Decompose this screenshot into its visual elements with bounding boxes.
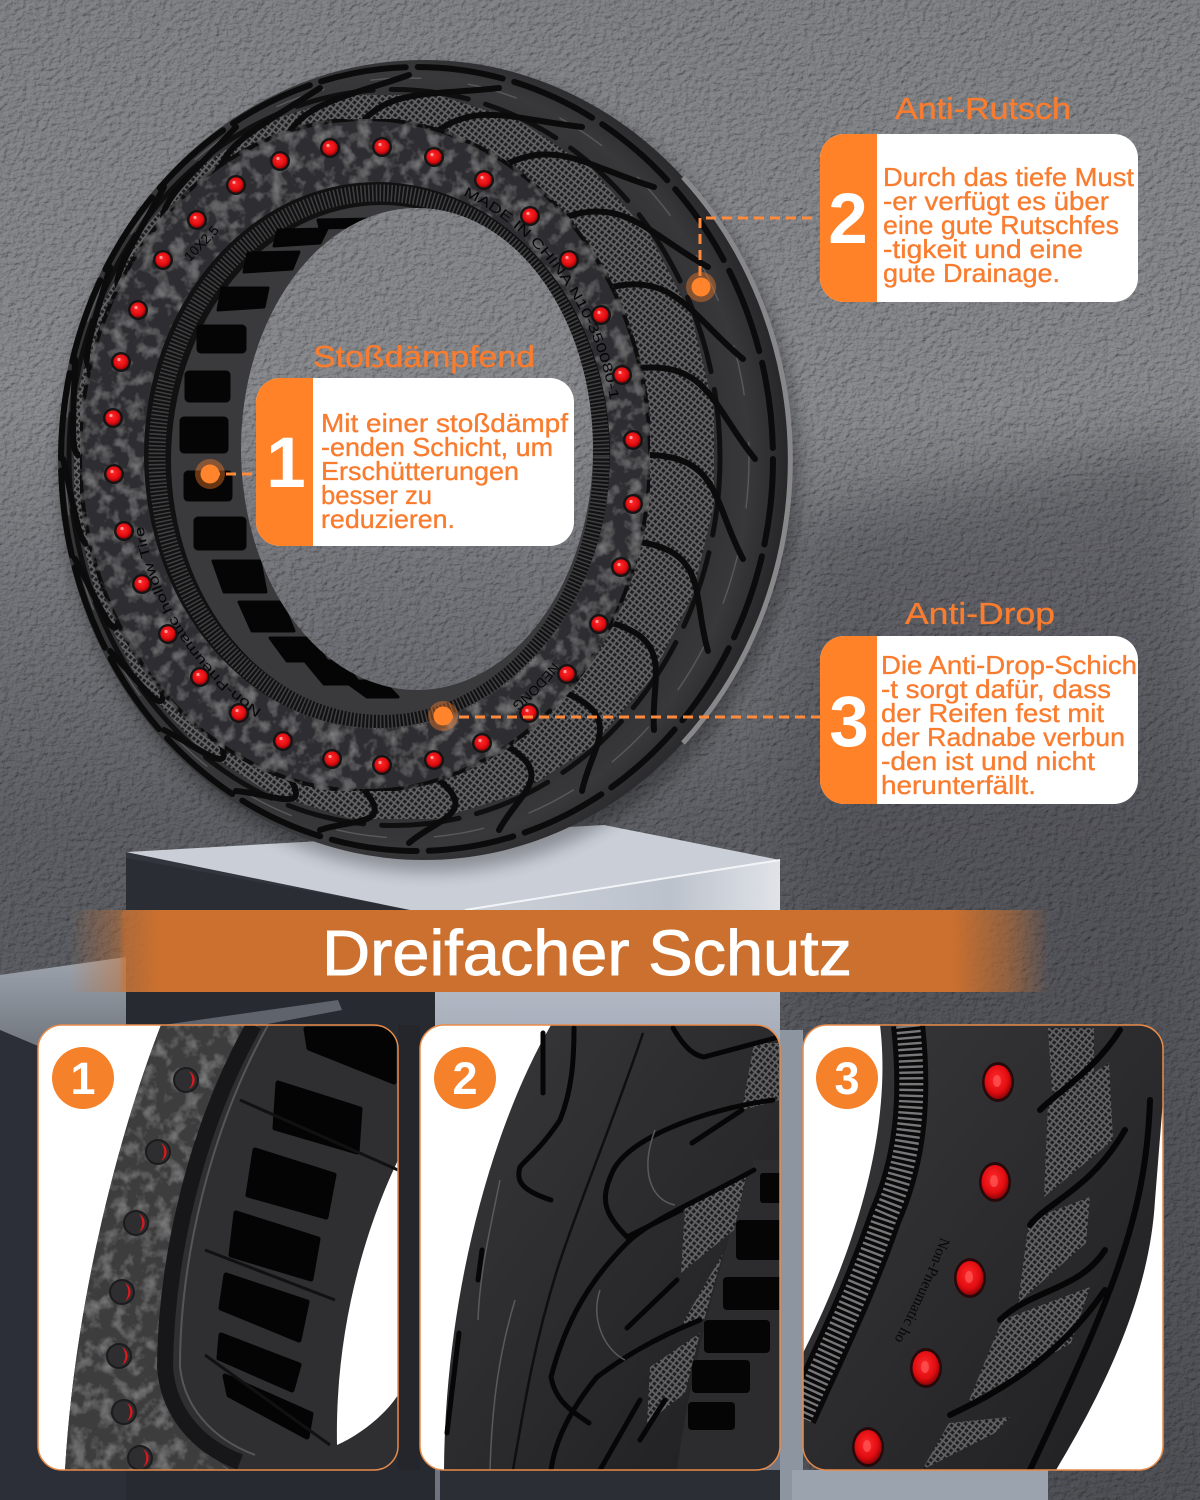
card 2: [820, 134, 1138, 302]
panel 3 mesh: [922, 1028, 1113, 1470]
card 2: 2: [828, 180, 868, 259]
panel 2 badge: [434, 1047, 496, 1109]
pedestal and lower blocks: [0, 825, 1048, 1500]
rim highlight: [683, 177, 790, 743]
card 3: herunterfällt.: [881, 770, 1036, 800]
card 1: Erschütterungen: [321, 456, 519, 486]
panel 3 grooves: [950, 1030, 1150, 1470]
card 1: besser zu: [321, 480, 432, 510]
leader line 1: [210, 472, 256, 476]
red dots: [103, 137, 643, 775]
heading 3: Anti-Drop: [905, 596, 1055, 631]
card 3: [820, 636, 1138, 804]
sidewall lettering: [137, 187, 618, 717]
title banner: [70, 910, 1050, 992]
card 3: Die Anti-Drop-Schich: [881, 650, 1137, 680]
leader line 2: [700, 218, 812, 287]
card 1: -enden Schicht, um: [321, 432, 553, 462]
panel 2 slots: [678, 1310, 779, 1469]
panel 2 badge: 2: [452, 1053, 478, 1104]
card 1: Mit einer stoßdämpf: [321, 408, 569, 438]
card 1: 1: [266, 424, 306, 503]
sidewall lettering: NEDONG: [513, 663, 559, 710]
callout 1: Stoßdämpfend: [256, 339, 574, 546]
card 2: -er verfügt es über: [883, 186, 1109, 216]
tread mesh patches: [74, 95, 714, 819]
panel 2: tread close-up: [420, 1025, 786, 1470]
panel 3: red dots close-up: [802, 1024, 1164, 1471]
tyre main photo: [54, 60, 806, 881]
panel 1 dots: [106, 1067, 199, 1471]
callout 3: Anti-Drop: [820, 596, 1138, 804]
title banner: Dreifacher Schutz: [322, 917, 852, 989]
panel 1 badge: 1: [70, 1053, 96, 1104]
panel 1 tyre: [65, 1025, 398, 1470]
card 1: reduzieren.: [321, 504, 455, 534]
panel 3 lettering: Non-Pneumatic ho: [896, 1238, 950, 1342]
marker 3: [428, 701, 458, 731]
panel 3 badge: 3: [834, 1053, 860, 1104]
card 3: 3: [829, 683, 869, 762]
panel 2 grooves: [447, 1028, 779, 1470]
panel 3 tyre: [803, 1025, 1163, 1470]
panel 2 border: [420, 1025, 780, 1470]
panel 1: sidewall close-up: [38, 1025, 398, 1471]
card 3: -t sorgt dafür, dass: [881, 674, 1111, 704]
panel 1 badge: [52, 1047, 114, 1109]
tyre body: [58, 60, 790, 860]
inner wall with slots: [171, 205, 593, 715]
leader line 3: [443, 716, 820, 718]
inner rib: [144, 182, 610, 728]
heading 1: Stoßdämpfend: [313, 339, 535, 374]
panel 1 border: [38, 1025, 398, 1470]
panel 3 border: [803, 1025, 1163, 1470]
panel 2 mesh: [647, 1043, 779, 1423]
sidewall lettering: MADE IN CHINA N10-350080-1: [464, 187, 618, 399]
ventilation slots: [181, 219, 398, 697]
panel 2 tyre: [444, 1025, 780, 1470]
card 2: gute Drainage.: [883, 258, 1060, 288]
card 3: der Radnabe verbun: [881, 722, 1125, 752]
tyre shadow: [60, 68, 800, 872]
callout 2: Anti-Rutsch: [820, 91, 1138, 302]
card 3: -den ist und nicht: [881, 746, 1096, 776]
card 1: [256, 378, 574, 546]
tread grooves: [61, 67, 773, 851]
card 3: der Reifen fest mit: [881, 698, 1105, 728]
sidewall lettering: 10X2.5: [185, 226, 218, 262]
card 2: eine gute Rutschfes: [883, 210, 1119, 240]
panel 3 badge: [816, 1047, 878, 1109]
sidewall lettering: Non-Pneumatic hollow Tire: [137, 528, 261, 717]
panel 3 dots: [852, 1062, 1014, 1467]
card 2: Durch das tiefe Must: [883, 162, 1135, 192]
marker 1: [195, 459, 225, 489]
card 2: -tigkeit und eine: [883, 234, 1083, 264]
marker 2: [686, 272, 716, 302]
sidewall band: [80, 119, 650, 791]
panel 3 rib: [800, 1025, 911, 1417]
heading 2: Anti-Rutsch: [895, 91, 1071, 126]
